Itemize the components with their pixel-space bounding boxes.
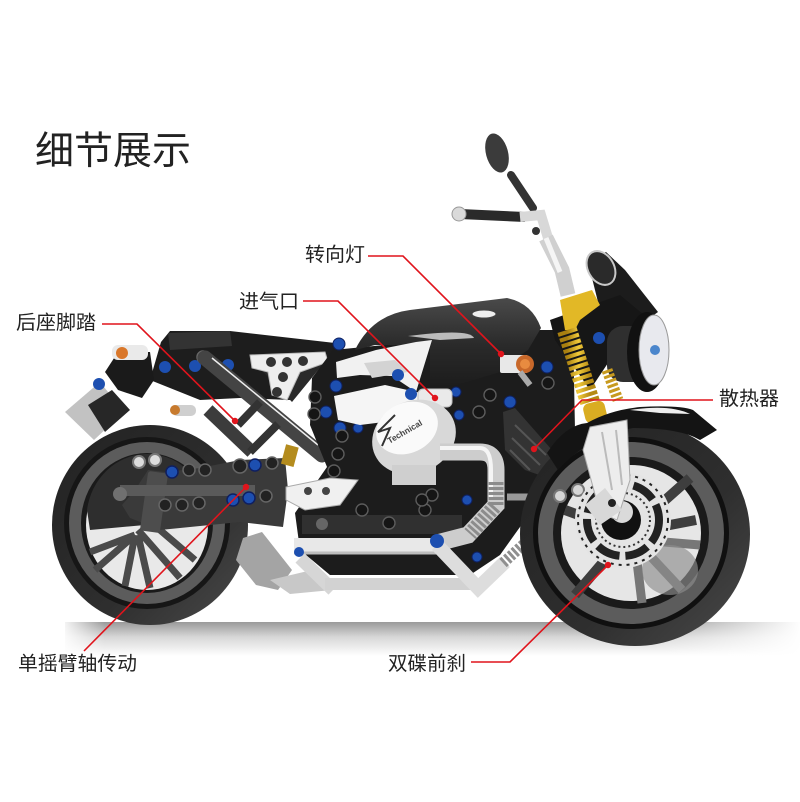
engine cover: [360, 386, 468, 488]
headlight and mount: [550, 246, 669, 392]
handlebar and mirror: [452, 131, 568, 295]
front fork with gold suspension: [560, 290, 618, 424]
motorcycle illustration: [52, 131, 800, 658]
callout: 单摇臂轴传动: [18, 484, 249, 675]
callout: 双碟前刹: 双碟前刹: [388, 653, 466, 675]
exhaust details: [286, 478, 444, 557]
rear tail and seat: [65, 331, 337, 440]
ground shadow: [60, 620, 800, 658]
front fender: [547, 406, 717, 470]
callout: 进气口: [239, 291, 438, 401]
callout: 散热器: 散热器: [719, 388, 779, 410]
engine cover: Technical: [386, 418, 424, 446]
fuel tank: [355, 298, 541, 393]
callout: 转向灯: [305, 244, 504, 357]
callout: 后座脚踏: [16, 312, 238, 424]
rear wheel: [52, 425, 248, 625]
main frame and engine block: [295, 330, 575, 575]
lower fork leg: [583, 420, 630, 525]
callout: 转向灯: 转向灯: [305, 244, 365, 266]
turn signal: [500, 355, 534, 385]
white tank panels: [334, 340, 432, 425]
callout: 进气口: 进气口: [239, 291, 299, 313]
air intake: [405, 388, 452, 407]
callout: 后座脚踏: 后座脚踏: [16, 312, 96, 334]
brake disc: [575, 472, 671, 568]
rear shock and triangular frame: [205, 352, 328, 467]
rear foot peg cluster: [236, 532, 332, 594]
exhaust pipe: [294, 448, 524, 590]
callout: 散热器: [531, 388, 779, 452]
front wheel: [520, 422, 750, 646]
radiator: [503, 408, 552, 478]
callout: 单摇臂轴传动: 单摇臂轴传动: [18, 653, 137, 675]
callout: 双碟前刹: [388, 562, 611, 675]
title: 细节展示: [35, 130, 191, 173]
swingarm: [113, 454, 288, 533]
